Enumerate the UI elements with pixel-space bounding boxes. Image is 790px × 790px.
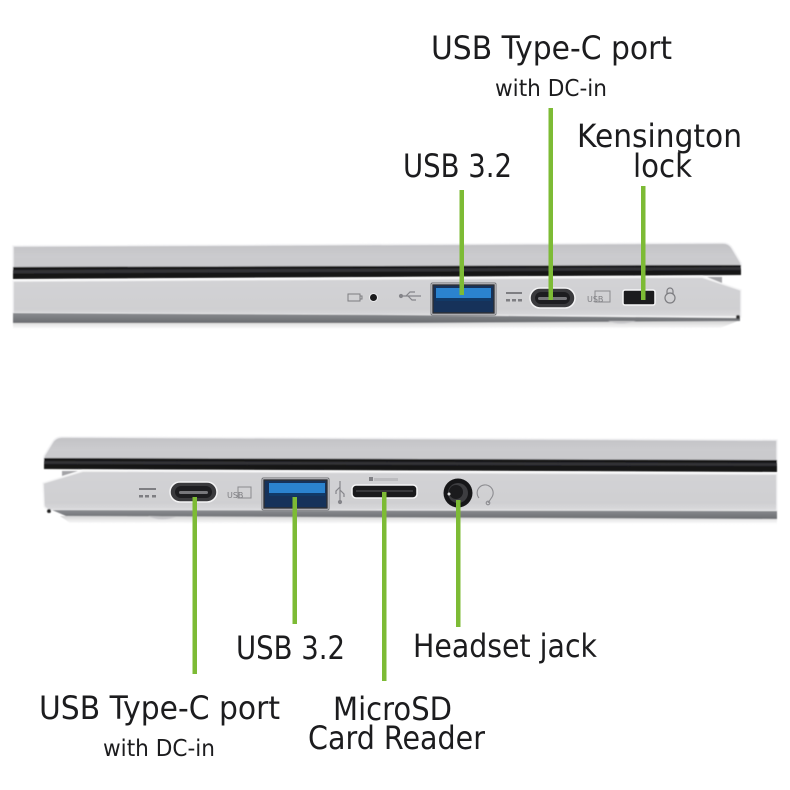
label: with DC-in top: with DC-in <box>495 76 607 102</box>
laptop: bottom view, left side <box>43 437 777 524</box>
icon: USB symbol <box>400 292 421 300</box>
port: headset jack <box>444 478 472 508</box>
icon: headset symbol <box>477 485 493 505</box>
label: Kensington: Kensington <box>577 117 742 155</box>
dark underside band <box>52 510 777 519</box>
laptop lid, right side view <box>13 243 741 269</box>
port: USB 3.2 Type-A <box>431 283 496 315</box>
port: MicroSD slot <box>352 485 417 498</box>
hinge gap, black strip <box>13 265 741 279</box>
soft shadow below base <box>60 516 777 524</box>
callout line: USB Type-C bottom <box>192 497 197 674</box>
battery status icon and LED <box>348 293 378 302</box>
icon: USB display symbol: USB <box>227 491 243 500</box>
icon: USB display symbol <box>227 487 251 500</box>
callout line: MicroSD <box>382 492 386 681</box>
laptop base <box>43 471 777 511</box>
hinge gap, black strip <box>44 458 777 472</box>
port: USB 3.2 Type-A <box>262 478 329 510</box>
callout line: USB 3.2 bottom <box>292 497 297 624</box>
callout line: Kensington lock <box>641 186 646 300</box>
icon: USB display symbol: USB <box>587 295 603 304</box>
label: MicroSD: MicroSD <box>333 690 452 728</box>
label: Headset jack: Headset jack <box>413 627 597 665</box>
label: USB Type-C port bottom: USB Type-C port <box>39 689 280 727</box>
callout line: USB 3.2 top <box>460 190 464 295</box>
port: Kensington lock <box>623 290 655 305</box>
soft shadow below base <box>13 321 738 329</box>
label: Card Reader: Card Reader <box>308 719 486 757</box>
dark underside band <box>13 313 740 323</box>
label: USB 3.2 top: USB 3.2 <box>403 147 512 185</box>
icon: USB display symbol <box>587 291 610 304</box>
icon: DC power symbol <box>139 488 156 498</box>
icon: MicroSD label <box>369 477 398 481</box>
laptop base <box>13 277 741 317</box>
label: with DC-in bottom: with DC-in <box>103 736 215 762</box>
laptop: top view, right side <box>13 243 741 329</box>
port: USB Type-C <box>170 482 217 502</box>
laptop lid, left side view <box>44 437 777 462</box>
label: lock: lock <box>633 147 692 185</box>
label: USB 3.2 bottom: USB 3.2 <box>236 629 345 667</box>
icon: USB symbol <box>336 481 344 504</box>
callout line: USB Type-C top <box>548 108 553 300</box>
icon: DC power symbol <box>506 292 522 302</box>
port: USB Type-C <box>530 288 575 308</box>
callout line: headset jack <box>456 500 460 627</box>
icon: padlock <box>665 288 675 303</box>
label: USB Type-C port top: USB Type-C port <box>431 29 672 67</box>
